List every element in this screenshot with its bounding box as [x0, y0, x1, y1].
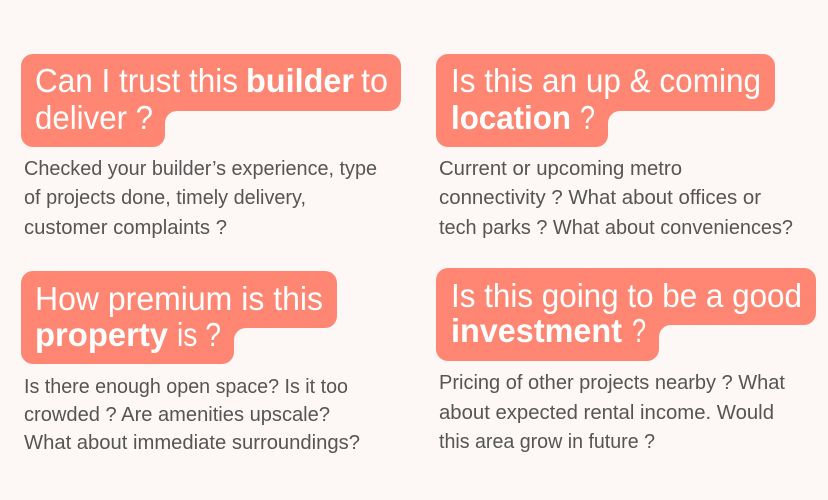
heading bubble: location — [436, 54, 775, 147]
heading: investment: Is this going to be a good — [451, 277, 802, 314]
heading: builder: builder — [246, 62, 354, 99]
body text: property: crowded ? Are amenities upscale? — [24, 404, 330, 426]
body text: investment — [439, 372, 785, 453]
heading: investment — [451, 277, 802, 349]
body text: property: Is there enough open space? Is it too — [24, 376, 348, 398]
heading: location: ? — [580, 99, 595, 136]
panel: investment — [436, 268, 816, 453]
heading: investment: ? — [632, 312, 646, 349]
body text: builder: of projects done, timely delivery, — [24, 187, 306, 209]
heading bubble: builder — [21, 54, 401, 147]
heading bubble: property — [21, 271, 337, 364]
heading: builder: deliver ? — [35, 99, 153, 136]
heading: location: Is this an up & coming — [451, 62, 761, 99]
body text: location: tech parks ? What about conveniences? — [439, 217, 793, 239]
body text: property — [24, 376, 360, 454]
panel: builder trust — [21, 54, 401, 239]
body text: builder: Checked your builder’s experience, type — [24, 158, 377, 180]
panel: premium property — [21, 271, 360, 454]
heading bubble: investment — [436, 268, 816, 361]
body text: builder: customer complaints ? — [24, 217, 227, 239]
heading: property — [35, 280, 323, 353]
body text: location: connectivity ? What about offices or — [439, 187, 761, 209]
heading: property: property — [35, 316, 169, 353]
heading: location — [451, 62, 761, 136]
heading: investment: investment — [451, 312, 622, 349]
heading: property: How premium is this — [35, 280, 323, 317]
body text: investment: Pricing of other projects nearby ? What — [439, 372, 785, 394]
panel: location — [436, 54, 793, 239]
body text: investment: this area grow in future ? — [439, 431, 655, 453]
heading: builder — [35, 62, 388, 136]
body text: investment: about expected rental income. Would — [439, 402, 774, 424]
body text: property: What about immediate surroundings? — [24, 432, 360, 454]
heading: builder: to — [361, 62, 388, 99]
heading: builder: Can I trust this — [35, 62, 238, 99]
body text: location — [439, 158, 793, 239]
heading: location: location — [451, 99, 571, 136]
heading: property: is ? — [177, 316, 221, 353]
body text: location: Current or upcoming metro — [439, 158, 682, 180]
body text: builder — [24, 158, 377, 239]
